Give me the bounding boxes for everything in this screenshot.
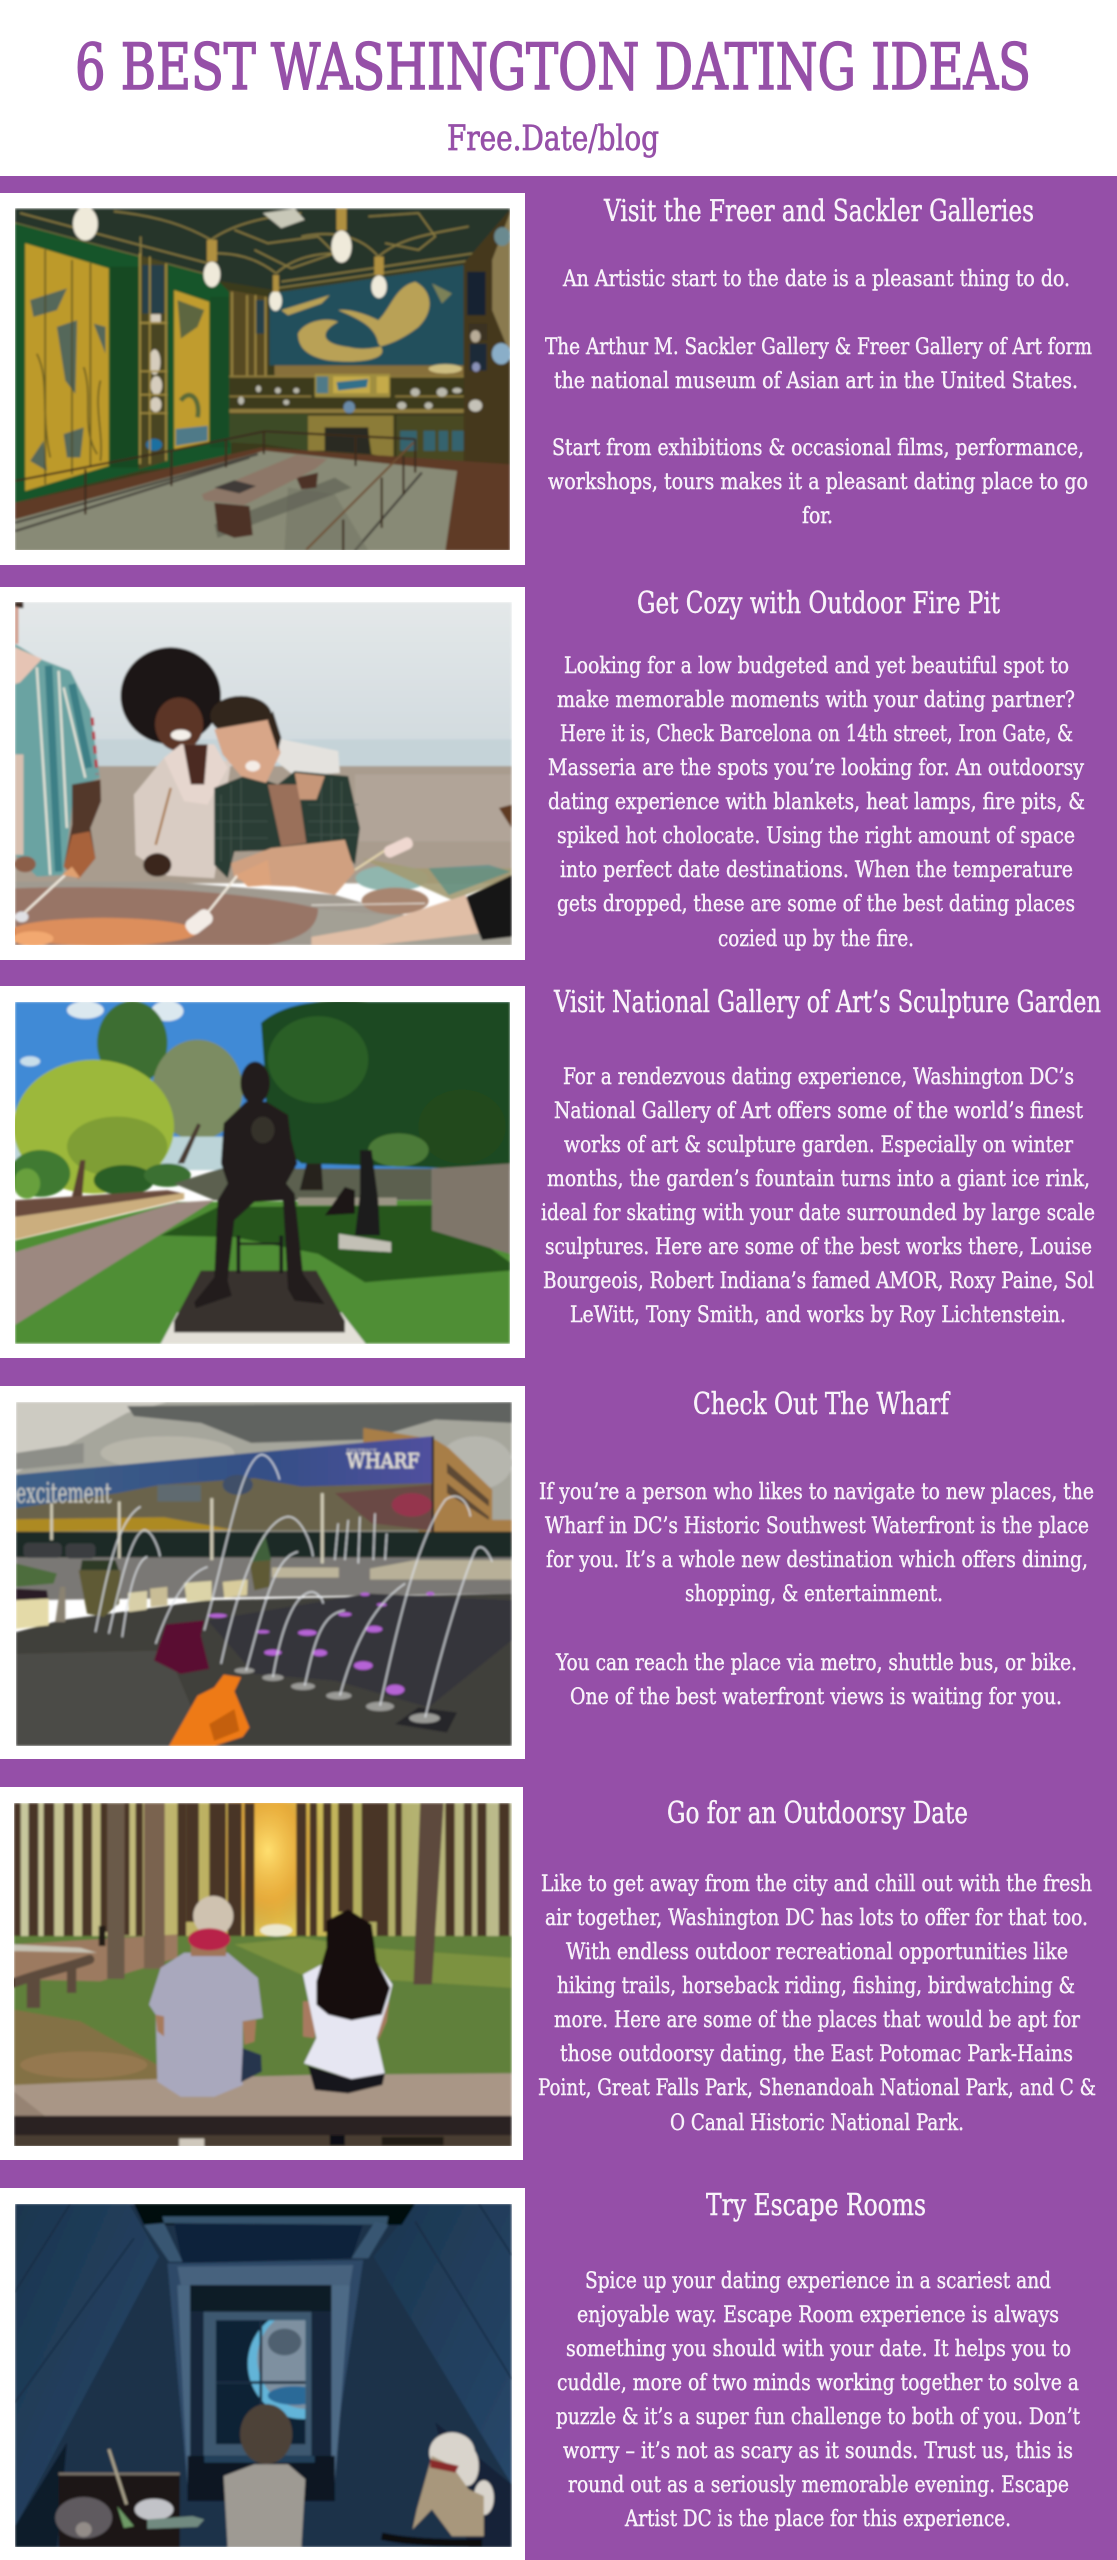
body text: One of the best waterfront views is waiting for you. [570,1684,1062,1710]
heading: Get Cozy with Outdoor Fire Pit [637,586,1000,620]
body text [539,1479,1094,1710]
body text: Start from exhibitions & occasional films, performance, [552,435,1084,461]
body text: Like to get away from the city and chill out with the fresh [541,1871,1092,1897]
body text: Spice up your dating experience in a scariest and [585,2268,1051,2294]
body text [556,2268,1080,2532]
body text: You can reach the place via metro, shuttle bus, or bike. [555,1650,1077,1676]
header panel [0,0,1117,176]
heading: Try Escape Rooms [706,2188,926,2222]
photo card: the Wharf fountains: DISTRICT [347,1448,377,1456]
photo card: couple in forest [0,1767,523,2160]
body text: air together, Washington DC has lots to offer for that too. [545,1905,1088,1931]
photo card: sculpture garden [0,986,525,1358]
photo card: gallery interior [0,193,525,565]
body text: Masseria are the spots you’re looking for. An outdoorsy [548,755,1085,781]
body text: round out as a seriously memorable evening. Escape [568,2472,1069,2498]
body text: cuddle, more of two minds working together to solve a [557,2370,1079,2396]
body text: gets dropped, these are some of the best dating places [557,891,1075,917]
photo card: the Wharf fountains [0,1386,525,1759]
panel: Outdoorsy Date [0,1767,1096,2160]
body text: works of art & sculpture garden. Especially on winter [564,1132,1073,1158]
body text: National Gallery of Art offers some of the world’s finest [554,1098,1083,1124]
body text [548,653,1085,952]
body text: spiked hot cholocate. Using the right amount of space [557,823,1075,849]
panel: Freer and Sackler Galleries [0,193,1092,565]
body text: make memorable moments with your dating partner? [557,687,1075,713]
body text: puzzle & it’s a super fun challenge to both of you. Don’t [556,2404,1080,2430]
body text: LeWitt, Tony Smith, and works by Roy Lichtenstein. [570,1302,1066,1328]
body text [541,1064,1095,1328]
photo card: the Wharf fountains: excitement [16,1477,112,1510]
body text: O Canal Historic National Park. [670,2110,964,2136]
body text: into perfect date destinations. When the temperature [560,857,1073,883]
heading: Go for an Outdoorsy Date [667,1796,968,1830]
body text: An Artistic start to the date is a pleasant thing to do. [562,266,1070,292]
subtitle: Free.Date/blog [447,119,659,159]
body text: enjoyable way. Escape Room experience is always [577,2302,1059,2328]
body text: more. Here are some of the places that would be apt for [554,2007,1080,2033]
body text: With endless outdoor recreational opportunities like [566,1939,1068,1965]
body text: for. [802,503,833,529]
body text [538,1871,1096,2136]
panel: Sculpture Garden [0,985,1101,1358]
body text [545,266,1092,529]
body text: shopping, & entertainment. [685,1581,943,1607]
body text: months, the garden’s fountain turns into a giant ice rink, [547,1166,1090,1192]
body text: those outdoorsy dating, the East Potomac Park-Hains [560,2041,1073,2067]
body text: workshops, tours makes it a pleasant dating place to go [548,469,1088,495]
panel: The Wharf [0,1386,1094,1759]
body text: dating experience with blankets, heat lamps, fire pits, & [548,789,1085,815]
body text: something you should with your date. It helps you to [566,2336,1071,2362]
body text: worry – it’s not as scary as it sounds. Trust us, this is [563,2438,1073,2464]
body text: for you. It’s a whole new destination which offers dining, [546,1547,1088,1573]
body text: hiking trails, horseback riding, fishing, birdwatching & [557,1973,1075,1999]
panel: Escape Rooms [0,2188,1080,2560]
body text: For a rendezvous dating experience, Washington DC’s [563,1064,1074,1090]
photo card: couple at fire pit [0,587,525,960]
body text: the national museum of Asian art in the United States. [554,368,1078,394]
body text: Artist DC is the place for this experience. [624,2506,1011,2532]
photo card: the Wharf fountains: WHARF [347,1449,420,1473]
heading: Check Out The Wharf [693,1387,951,1421]
body text: Wharf in DC’s Historic Southwest Waterfront is the place [545,1513,1089,1539]
body text: Looking for a low budgeted and yet beautiful spot to [564,653,1069,679]
photo card: attic escape room [0,2188,525,2560]
heading: Visit the Freer and Sackler Galleries [603,194,1034,228]
body text: cozied up by the fire. [718,926,914,952]
panel: Outdoor Fire Pit [0,586,1085,960]
